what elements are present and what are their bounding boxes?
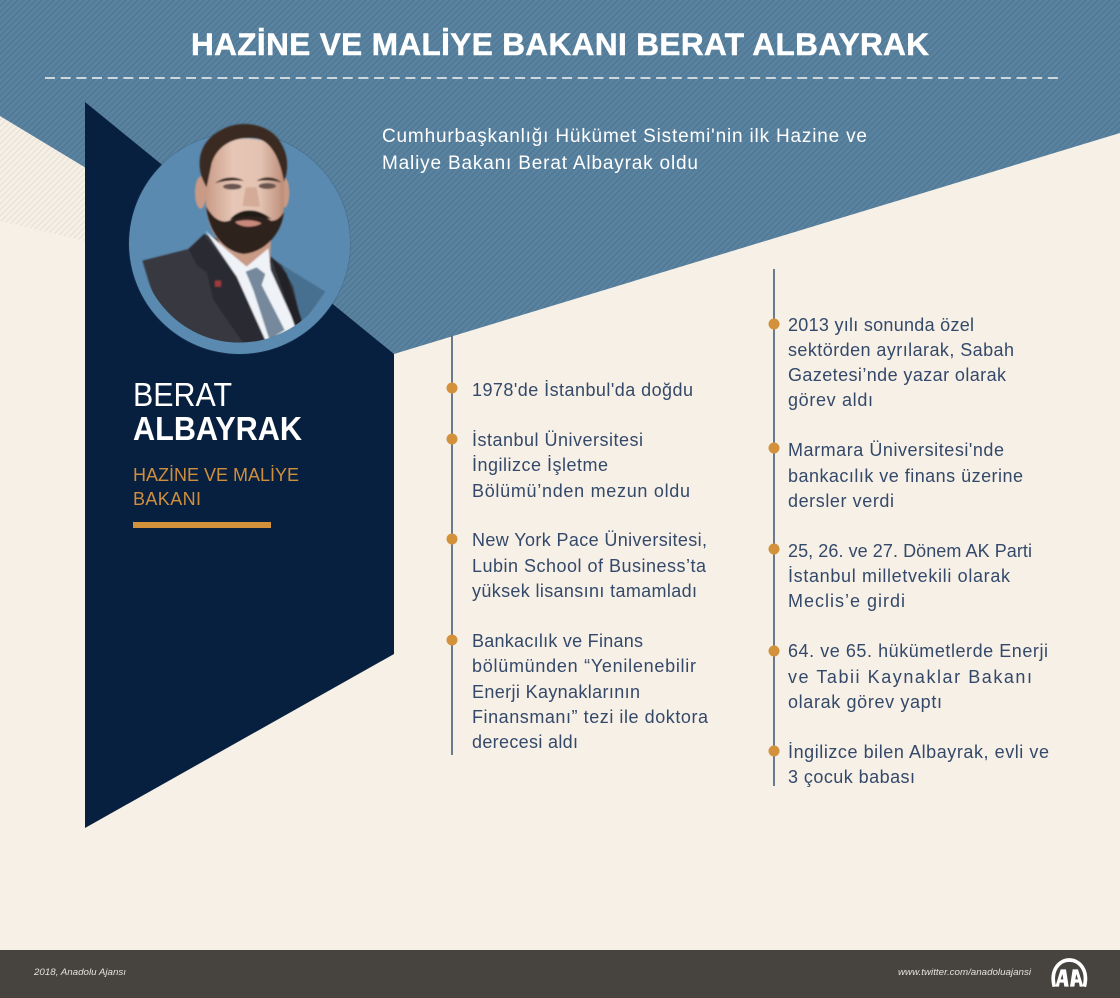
right timeline [768, 269, 1049, 787]
pin [215, 281, 221, 287]
navy profile panel [85, 102, 394, 828]
right timeline text: Meclis’e girdi [788, 591, 905, 611]
left timeline text [472, 380, 709, 752]
name: ALBAYRAK [133, 410, 302, 447]
beard [206, 206, 284, 254]
right timeline text: sektörden ayrılarak, Sabah [788, 340, 1014, 360]
left timeline text: yüksek lisansını tamamladı [472, 581, 697, 601]
tie [246, 267, 285, 339]
left timeline text: İstanbul Üniversitesi [472, 430, 643, 450]
left timeline text: Bankacılık ve Finans [472, 631, 643, 651]
subtitle: Maliye Bakanı Berat Albayrak oldu [382, 153, 698, 174]
neck [218, 240, 272, 267]
footer credit: 2018, Anadolu Ajansı [33, 967, 126, 978]
name [133, 376, 302, 447]
face [205, 139, 284, 254]
title: HAZİNE VE MALİYE BAKANI BERAT ALBAYRAK [191, 26, 929, 62]
subtitle: Cumhurbaşkanlığı Hükümet Sistemi'nin ilk Hazine ve [382, 126, 867, 147]
shirt [205, 231, 296, 340]
left timeline text: İngilizce İşletme [472, 455, 608, 475]
left timeline text: bölümünden “Yenilenebilir [472, 656, 696, 676]
brows and eyes [215, 177, 244, 183]
left timeline [446, 336, 709, 755]
left timeline text: Enerji Kaynaklarının [472, 682, 640, 702]
name: BERAT [133, 376, 232, 413]
right timeline text: olarak görev yaptı [788, 692, 942, 712]
right timeline text: Gazetesi’nde yazar olarak [788, 365, 1007, 385]
right lapel [271, 256, 303, 327]
left timeline text: derecesi aldı [472, 732, 578, 752]
role: HAZİNE VE MALİYE [133, 465, 299, 485]
right timeline text: 64. ve 65. hükümetlerde Enerji [788, 641, 1048, 661]
cream striped band [0, 116, 85, 241]
right timeline text: ve Tabii Kaynaklar Bakanı [788, 667, 1032, 687]
left lapel [188, 235, 265, 343]
nose shade [243, 187, 260, 207]
right timeline text: görev aldı [788, 390, 873, 410]
ears [195, 177, 206, 209]
right timeline text: 25, 26. ve 27. Dönem AK Parti [788, 541, 1032, 561]
right timeline text: Marmara Üniversitesi'nde [788, 440, 1004, 460]
footer [0, 950, 1120, 998]
left timeline text: New York Pace Üniversitesi, [472, 530, 707, 550]
right timeline text: bankacılık ve finans üzerine [788, 466, 1023, 486]
left timeline text: Bölümü’nden mezun oldu [472, 481, 690, 501]
right timeline text: İstanbul milletvekili olarak [788, 566, 1011, 586]
left timeline text: Lubin School of Business’ta [472, 556, 707, 576]
right timeline text [788, 315, 1049, 787]
jacket [142, 234, 325, 347]
portrait [128, 124, 351, 355]
role [133, 465, 299, 509]
subtitle [382, 126, 867, 174]
hair [200, 124, 287, 187]
right timeline text: 3 çocuk babası [788, 767, 915, 787]
role underline [133, 522, 271, 528]
role: BAKANI [133, 489, 201, 509]
left timeline text: 1978'de İstanbul'da doğdu [472, 380, 693, 400]
right timeline text: dersler verdi [788, 491, 894, 511]
footer link: www.twitter.com/anadoluajansi [898, 967, 1032, 978]
right timeline text: İngilizce bilen Albayrak, evli ve [788, 742, 1049, 762]
icon: AA logo [1053, 960, 1085, 987]
blue header shape [0, 0, 1120, 354]
left timeline text: Finansmanı” tezi ile doktora [472, 707, 709, 727]
right timeline text: 2013 yılı sonunda özel [788, 315, 974, 335]
